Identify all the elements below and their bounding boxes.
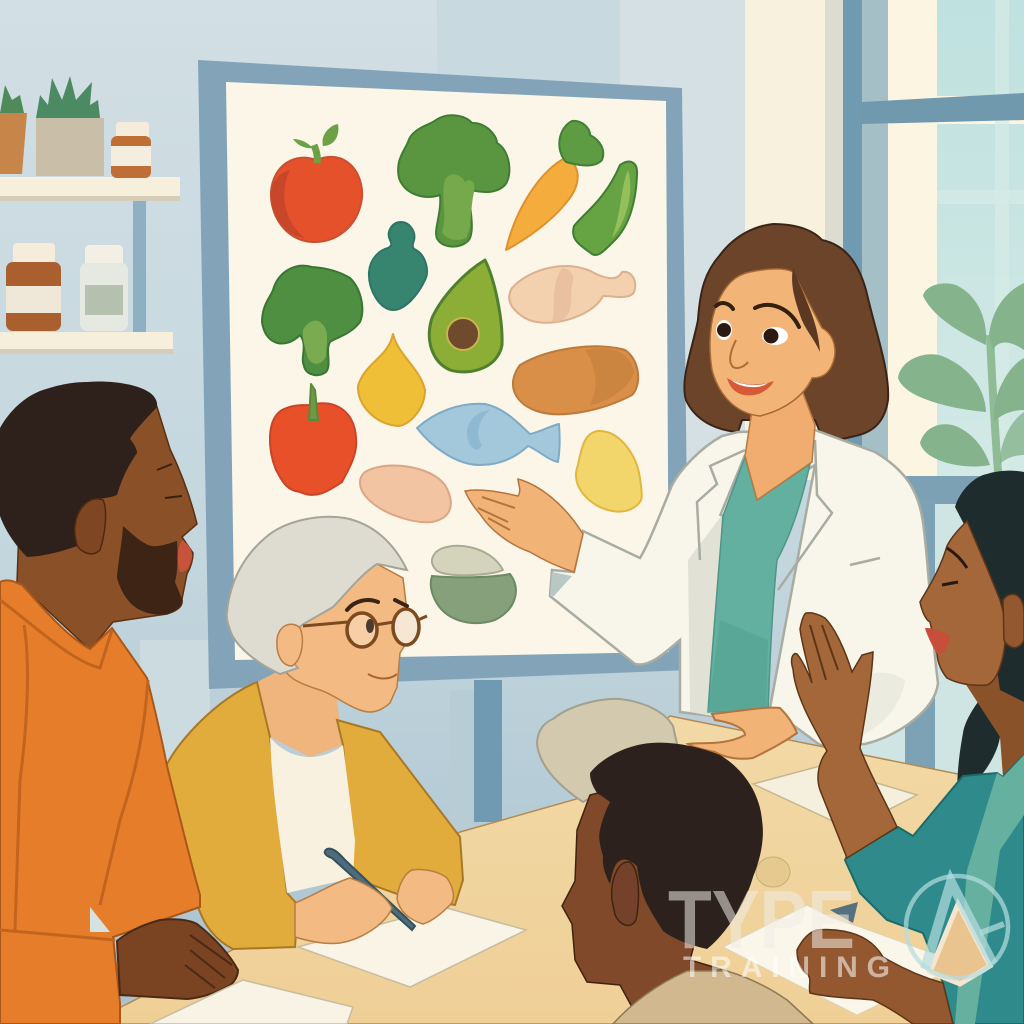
logo backing inside circle [930, 904, 990, 984]
woman: notebook [298, 907, 526, 987]
presenter: face [710, 268, 835, 416]
icon: chicken [509, 266, 635, 323]
paper right lower [723, 902, 955, 1015]
woman: cardigan [167, 682, 463, 949]
shelf items [0, 76, 151, 331]
icon: chicken breast [360, 466, 451, 522]
woman: hands and pen [295, 849, 453, 943]
presenter: white coat [550, 430, 938, 745]
icon: lemon [576, 431, 642, 512]
woman right: hair and face [920, 471, 1024, 702]
woman: shirt [270, 737, 355, 893]
presenter: lower hand [688, 708, 797, 759]
plant in window [898, 283, 1024, 472]
woman right: raised hand and arm [792, 613, 897, 858]
man left: beard [117, 526, 182, 615]
icon: teal heart [369, 222, 427, 310]
notebook left [150, 980, 353, 1024]
icon: bowl [431, 546, 516, 623]
icon: tomato [271, 124, 362, 242]
woman right: neck and lower hair [950, 610, 1024, 798]
beige object on table [537, 699, 677, 802]
woman: head [227, 517, 427, 712]
woman right: top [845, 755, 1024, 1024]
watermark logo [906, 876, 1008, 978]
presenter: neck [745, 385, 815, 500]
icon: avocado [429, 260, 502, 372]
shelves [0, 177, 180, 354]
icon: green pepper [573, 162, 637, 255]
presenter: scrubs [708, 457, 810, 712]
man left: hair [0, 381, 157, 557]
presenter: pointing hand [465, 479, 583, 596]
watermark text: TYPE [668, 873, 855, 966]
woman: neck and body [167, 660, 463, 949]
woman right: lower hand [797, 929, 953, 1024]
window [843, 0, 1024, 780]
icon: red pepper [270, 384, 356, 495]
icon: blue fish [417, 404, 560, 465]
man left: hand [117, 919, 238, 999]
icon: broccoli left [262, 266, 362, 375]
paper on table back [753, 766, 917, 887]
man left: sweater [0, 580, 200, 1024]
man left: ear [75, 499, 106, 554]
icon: bread [513, 346, 638, 414]
food icons on poster [262, 115, 642, 623]
watermark text: TRAINING [683, 951, 890, 984]
poster board [198, 60, 689, 689]
watermark [668, 873, 1008, 984]
man left: neck and head [0, 381, 197, 650]
table [88, 716, 1024, 1024]
icon: carrot [506, 121, 603, 250]
presenter: hair back [684, 224, 888, 444]
poster easel leg [474, 680, 502, 822]
icon: yellow onion [358, 334, 425, 426]
man front: head and shirt [562, 743, 813, 1024]
icon: broccoli top [398, 115, 509, 247]
